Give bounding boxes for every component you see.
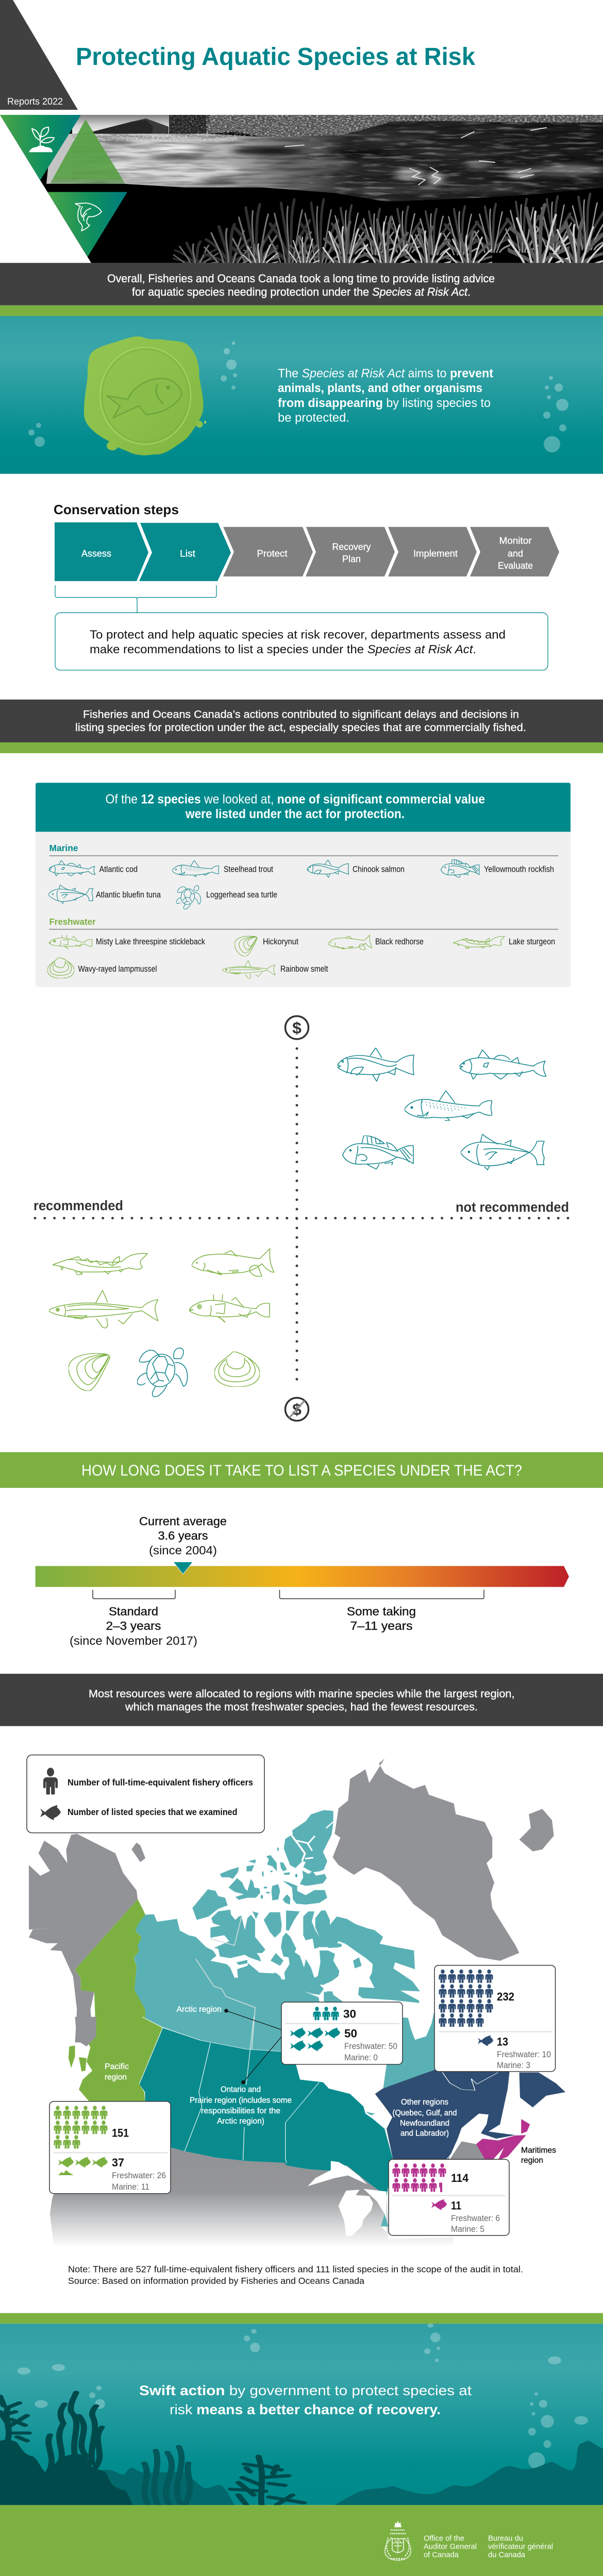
marine species list: Marine <box>49 843 78 853</box>
teal panel: Species at Risk Act purpose <box>0 316 603 474</box>
timeline chart <box>36 1514 569 1647</box>
label: some taking: Some taking <box>347 1604 416 1618</box>
Iceland <box>520 1809 554 1851</box>
step: protect <box>223 527 313 577</box>
leader lines and region labels: responsibilities for the <box>201 2107 280 2115</box>
closing underwater panel <box>0 2324 603 2505</box>
text: purpose of the act <box>278 367 493 425</box>
Arctic region traced <box>134 1810 420 2052</box>
dark banner: finding 2: Fisheries and Oceans Canada’s actions contributed to significant delays and decisions in <box>83 709 519 720</box>
marine species list: Chinook salmon <box>353 865 405 874</box>
icon: fishery officer <box>43 1768 58 1795</box>
photo banner: water surface and seagrass <box>0 115 603 268</box>
label: recommended: recommended <box>34 1198 123 1213</box>
Maritimes region <box>476 2135 526 2160</box>
Greenland <box>333 1758 520 1961</box>
Arctic channels <box>291 1822 362 1958</box>
marine species list: Atlantic cod <box>99 865 138 874</box>
title: Protecting Aquatic Species at Risk <box>76 43 476 71</box>
legend: Number of full-time-equivalent fishery officers <box>68 1777 253 1787</box>
step: implement <box>388 527 477 577</box>
process chevrons <box>55 522 559 581</box>
label: not recommended: not recommended <box>456 1199 569 1215</box>
data box: Arctic region: Freshwater: 50 <box>344 2041 397 2051</box>
dark banner: finding 2: listing species for protection under the act, especially species that are commercially fished. <box>75 722 526 734</box>
freshwater species list: Hickorynut <box>263 937 298 946</box>
icon: wax seal with fish <box>84 336 206 455</box>
freshwater species list: Black redhorse <box>375 937 424 946</box>
panel header <box>36 783 571 832</box>
gradient bar <box>36 1566 569 1587</box>
freshwater species list: Wavy-rayed lampmussel <box>78 964 157 974</box>
icon: coat of arms <box>385 2521 411 2560</box>
label: some taking <box>347 1604 416 1633</box>
leader lines and region labels: Ontario and <box>221 2086 261 2094</box>
panel: 12 species <box>36 783 571 987</box>
map of Canada with regions <box>29 1758 565 2248</box>
panel header: Of the 12 species we looked at, none of significant commercial value <box>106 792 485 806</box>
green heading banner: HOW LONG DOES IT TAKE TO LIST A SPECIES UNDER THE ACT? <box>81 1462 522 1479</box>
text: Bureau du vérificateur général du Canada: vérificateur général <box>488 2543 553 2551</box>
header corner triangle with report label: Reports 2022 <box>7 96 63 107</box>
legend: Number of listed species that we examined <box>68 1807 238 1817</box>
data box: Pacific region: Freshwater: 26 <box>112 2171 166 2180</box>
panel body <box>36 783 571 987</box>
leader lines and region labels: region <box>105 2073 127 2082</box>
text: Bureau du vérificateur général du Canada: Bureau du <box>488 2535 523 2543</box>
triangle: plant icon <box>0 115 81 180</box>
closing message: risk means a better chance of recovery. <box>170 2402 441 2417</box>
axis: recommendation (dotted) <box>35 1217 568 1219</box>
triangle: translucent green overlay <box>50 120 125 184</box>
icon: commercial value: $ <box>292 1019 301 1037</box>
bracket: some taking <box>279 1590 484 1599</box>
bracket: standard <box>93 1590 175 1599</box>
header corner triangle with report label <box>0 0 78 110</box>
data box: Arctic region: Marine: 0 <box>344 2053 378 2062</box>
leader lines and region labels: Prairie region (includes some <box>190 2096 292 2105</box>
marker: 3.6 years <box>173 1562 193 1574</box>
heading: conservation steps: Conservation steps <box>54 503 179 517</box>
step: assess: Assess <box>81 548 111 559</box>
dark banner: finding 1: Overall, Fisheries and Oceans Canada took a long time to provide listing advice <box>107 272 495 285</box>
label: standard: Standard <box>109 1604 158 1618</box>
data box: Maritimes region: Freshwater: 6 <box>451 2213 500 2223</box>
bracket connector <box>55 585 216 613</box>
map lower part <box>50 2013 565 2248</box>
United States <box>50 2148 454 2248</box>
label: current average: 3.6 years <box>158 1529 208 1543</box>
dark banner: finding 3 <box>0 1674 603 1726</box>
Arctic islands <box>192 1810 420 2003</box>
green stripe <box>0 742 603 753</box>
label: standard <box>70 1604 197 1647</box>
label: current average: Current average <box>139 1514 227 1528</box>
note and source: Source: Based on information provided by Fisheries and Oceans Canada <box>68 2276 364 2286</box>
leader lines and region labels: Other regions <box>401 2098 448 2107</box>
data box: other regions <box>434 1965 556 2072</box>
data box: Maritimes region: Marine: 5 <box>451 2224 484 2234</box>
Arctic mainland <box>134 1914 343 2052</box>
leader lines and region labels: region <box>521 2156 543 2165</box>
step: list: List <box>180 548 196 559</box>
dark banner: finding 1: for aquatic species needing protection under the Species at Risk Act. <box>132 285 471 298</box>
data box: Arctic region <box>281 2002 403 2064</box>
freshwater species list: Lake sturgeon <box>509 937 555 946</box>
icon: no commercial value <box>286 1398 308 1421</box>
step: monitor and evaluate: Monitor <box>499 536 532 546</box>
label: standard: 2–3 years <box>106 1619 161 1633</box>
icon: commercial value <box>286 1016 308 1039</box>
label: current average: (since 2004) <box>149 1544 217 1557</box>
step: monitor and evaluate: and <box>508 548 523 559</box>
freshwater species list: Rainbow smelt <box>280 964 328 974</box>
step: list <box>139 523 231 581</box>
quadrant chart: recommended vs commercial value <box>34 1016 569 1421</box>
note and source <box>68 2264 523 2286</box>
label: current average <box>139 1514 227 1557</box>
leader lines and region labels: Pacific <box>105 2062 129 2071</box>
panel header: were listed under the act for protection. <box>185 807 405 821</box>
dark banner: finding 3: which manages the most freshwater species, had the fewest resources. <box>125 1701 478 1713</box>
freshwater species list: Freshwater <box>49 917 96 927</box>
text: Office of the Auditor General of Canada: Office of the <box>424 2535 464 2543</box>
Great Lakes <box>308 2161 387 2236</box>
text: Office of the Auditor General of Canada: Auditor General <box>424 2543 477 2551</box>
dark banner: finding 2 <box>0 700 603 742</box>
step: monitor and evaluate <box>470 527 559 577</box>
data box: Maritimes region: 11 <box>451 2199 461 2212</box>
marine species list: Steelhead trout <box>224 865 273 874</box>
dark banner: finding 1 <box>0 263 603 306</box>
icon: no commercial value: $ <box>292 1400 301 1418</box>
dark banner: finding 3: Most resources were allocated to regions with marine species while the largest region, <box>89 1688 514 1700</box>
data box: other regions: 232 <box>497 1990 514 2003</box>
quadrant: commercial species not recommended <box>338 1048 546 1170</box>
closing message: Swift action by government to protect species at <box>139 2383 472 2398</box>
triangle: fish icon <box>47 192 127 257</box>
map upper part: Greenland, Iceland, Alaska, Pacific <box>29 1758 554 2042</box>
footer <box>0 2505 603 2576</box>
legend <box>27 1755 264 1833</box>
bubbles <box>28 342 568 452</box>
callout box: assess and list: make recommendations to list a species under the Species at Risk Act . <box>90 642 476 656</box>
step: recovery plan <box>306 527 395 577</box>
text: purpose of the act: The Species at Risk Act aims to prevent <box>278 367 493 380</box>
data box: other regions: Marine: 3 <box>497 2060 530 2070</box>
data box: other regions: Freshwater: 10 <box>497 2049 551 2059</box>
green heading banner <box>0 1452 603 1488</box>
leader lines and region labels: Maritimes <box>521 2146 556 2155</box>
text: Bureau du vérificateur général du Canada <box>488 2535 553 2559</box>
leader lines and region labels: (Quebec, Gulf, and <box>393 2109 457 2117</box>
step: recovery plan: Plan <box>342 554 361 565</box>
Ontario and Prairie region <box>139 2028 393 2196</box>
label: some taking: 7–11 years <box>350 1619 412 1633</box>
Pacific region lower <box>79 2017 163 2103</box>
data box: Pacific region <box>49 2102 171 2194</box>
freshwater species list <box>47 917 558 978</box>
data box: Arctic region: 30 <box>343 2008 356 2021</box>
closing message <box>139 2383 472 2417</box>
leader lines and region labels: Arctic region <box>176 2005 222 2014</box>
leader lines and region labels: Newfoundland <box>400 2119 449 2128</box>
seabed, kelp, coral and bubbles <box>0 2324 603 2505</box>
callout box: assess and list: To protect and help aquatic species at risk recover, departments assess and <box>90 628 506 641</box>
data box: Maritimes region: 114 <box>451 2172 469 2184</box>
Alaska <box>29 1834 138 2042</box>
text: purpose of the act: from disappearing by listing species to <box>278 396 491 410</box>
marine species list <box>48 843 558 909</box>
Pacific region upper <box>75 1899 163 2042</box>
green stripe <box>0 306 603 316</box>
step: recovery plan: Recovery <box>332 541 371 552</box>
green stripe <box>0 2313 603 2324</box>
text: Bureau du vérificateur général du Canada: du Canada <box>488 2551 526 2559</box>
icon: species fish <box>40 1805 61 1820</box>
axis: commercial value (dotted) <box>296 1048 298 1388</box>
text: Office of the Auditor General of Canada: of Canada <box>424 2551 459 2559</box>
data box: Pacific region: 151 <box>112 2127 129 2140</box>
leader lines and region labels <box>105 2005 556 2165</box>
label: standard: (since November 2017) <box>70 1634 197 1647</box>
freshwater species list: Misty Lake threespine stickleback <box>96 937 206 946</box>
step: implement: Implement <box>413 548 458 559</box>
territorial boundaries <box>196 1918 255 2052</box>
data box: Pacific region: Marine: 11 <box>112 2182 149 2192</box>
marine species list: Yellowmouth rockfish <box>484 865 554 874</box>
marine species list: Loggerhead sea turtle <box>206 890 277 900</box>
leader lines and region labels: and Labrador) <box>400 2129 449 2138</box>
left white cut-out <box>0 115 91 263</box>
quadrant: non-commercial species recommended <box>49 1248 274 1397</box>
text: purpose of the act: animals, plants, and other organisms <box>278 381 482 395</box>
note and source: Note: There are 527 full-time-equivalent fishery officers and 111 listed species in the scope of the audit in total. <box>68 2264 523 2274</box>
text: purpose of the act: be protected. <box>278 411 349 425</box>
data box: Pacific region: 37 <box>112 2156 124 2169</box>
data box: Maritimes region <box>389 2159 509 2235</box>
leader lines and region labels: Arctic region) <box>217 2117 264 2126</box>
marine species list: Atlantic bluefin tuna <box>96 890 161 900</box>
data box: Arctic region: 50 <box>344 2027 357 2040</box>
text: Office of the Auditor General of Canada <box>424 2535 477 2559</box>
step: protect: Protect <box>257 548 288 559</box>
callout box: assess and list <box>55 613 548 670</box>
data box: other regions: 13 <box>497 2035 508 2048</box>
Other regions (navy) <box>375 2070 515 2160</box>
step: assess <box>55 522 148 581</box>
Arctic region lower-east <box>383 2013 436 2089</box>
step: monitor and evaluate: Evaluate <box>498 561 533 571</box>
